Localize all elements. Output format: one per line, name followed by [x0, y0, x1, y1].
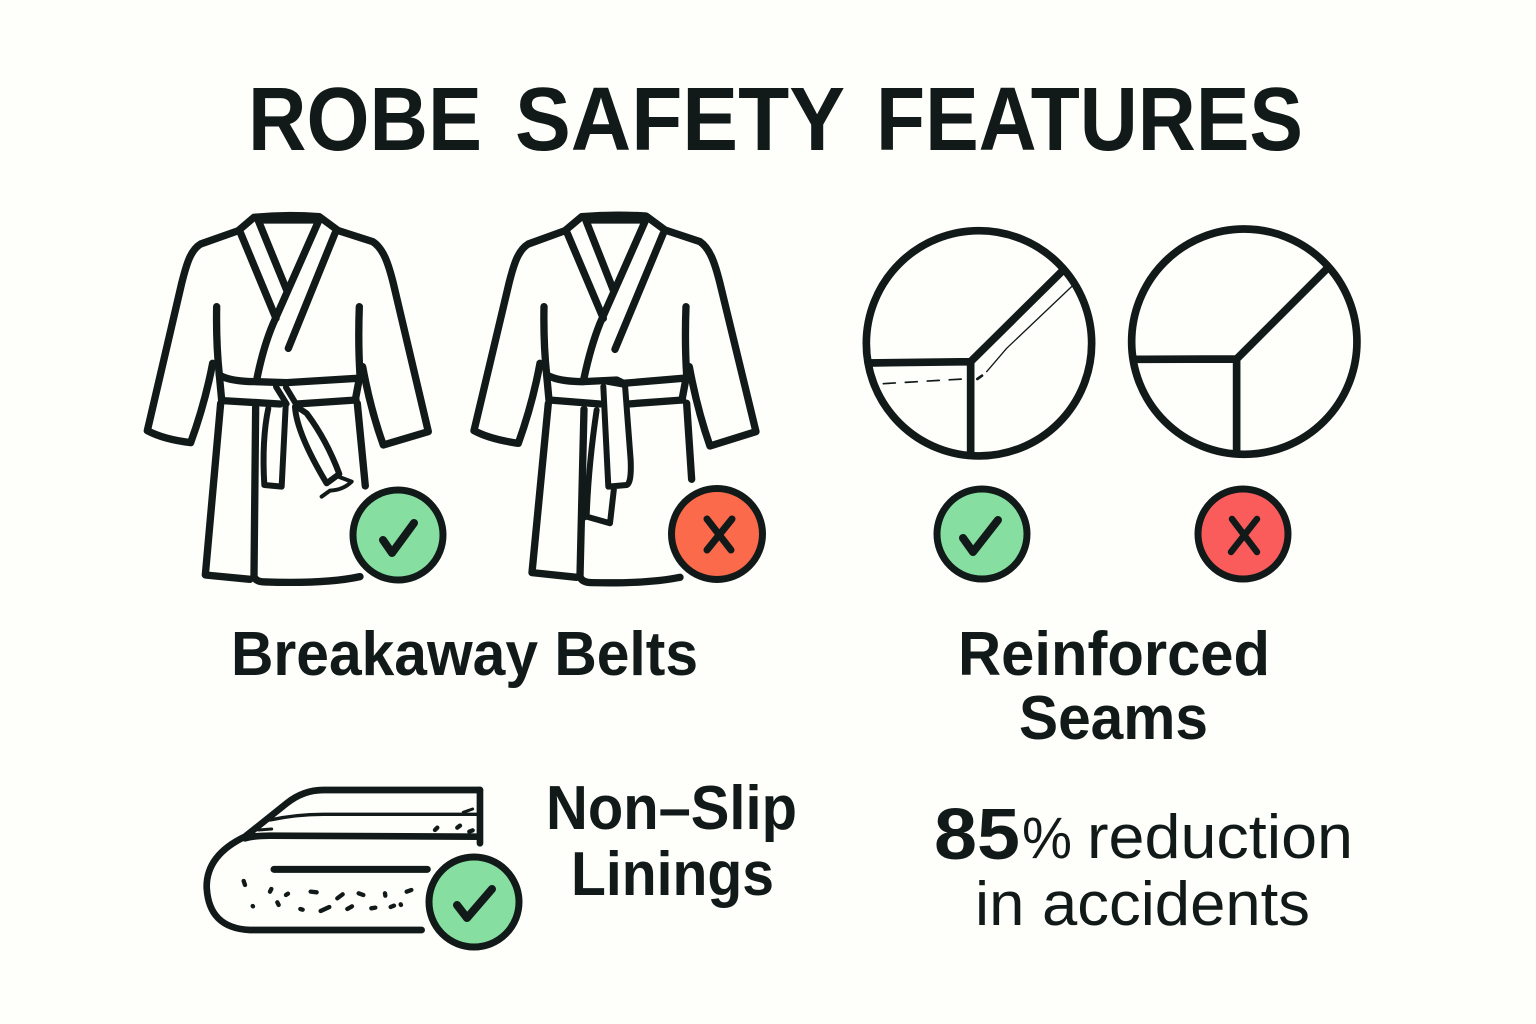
label: non-slip linings: Non–Slip [546, 774, 797, 843]
title: ROBE [248, 70, 482, 170]
callout: 85% reduction in accidents [934, 795, 1353, 939]
label: reinforced seams: Seams [1019, 684, 1208, 753]
title: SAFETY [515, 70, 845, 170]
panel: non-slip linings [207, 774, 797, 947]
label: non-slip linings [546, 774, 797, 909]
label: breakaway belts: Breakaway Belts [231, 620, 698, 689]
icon: green check badge [353, 490, 443, 580]
callout: 85% reduction in accidents: reduction [1087, 803, 1353, 872]
label: reinforced seams: Reinforced [958, 620, 1270, 689]
title: FEATURES [876, 70, 1303, 170]
icon: green check badge [429, 857, 519, 947]
icon: red cross badge [672, 488, 762, 580]
label: reinforced seams [958, 620, 1270, 753]
icon: robe with breakaway belt [147, 215, 428, 582]
icon: plain seam circle [1132, 229, 1357, 454]
panel: breakaway belts [147, 215, 762, 689]
callout: 85% reduction in accidents: 85 [934, 795, 1020, 875]
icon: green check badge [937, 489, 1027, 579]
callout: 85% reduction in accidents: in accidents [975, 870, 1310, 939]
title [248, 70, 1303, 170]
label: non-slip linings: Linings [571, 840, 774, 909]
icon: reinforced seam circle [866, 231, 1092, 456]
icon: robe with standard belt [474, 215, 756, 583]
icon: folded non-slip towel [207, 790, 480, 930]
icon: red cross badge [1198, 489, 1288, 579]
callout: 85% reduction in accidents: % [1022, 806, 1072, 871]
panel: reinforced seams [866, 229, 1357, 753]
